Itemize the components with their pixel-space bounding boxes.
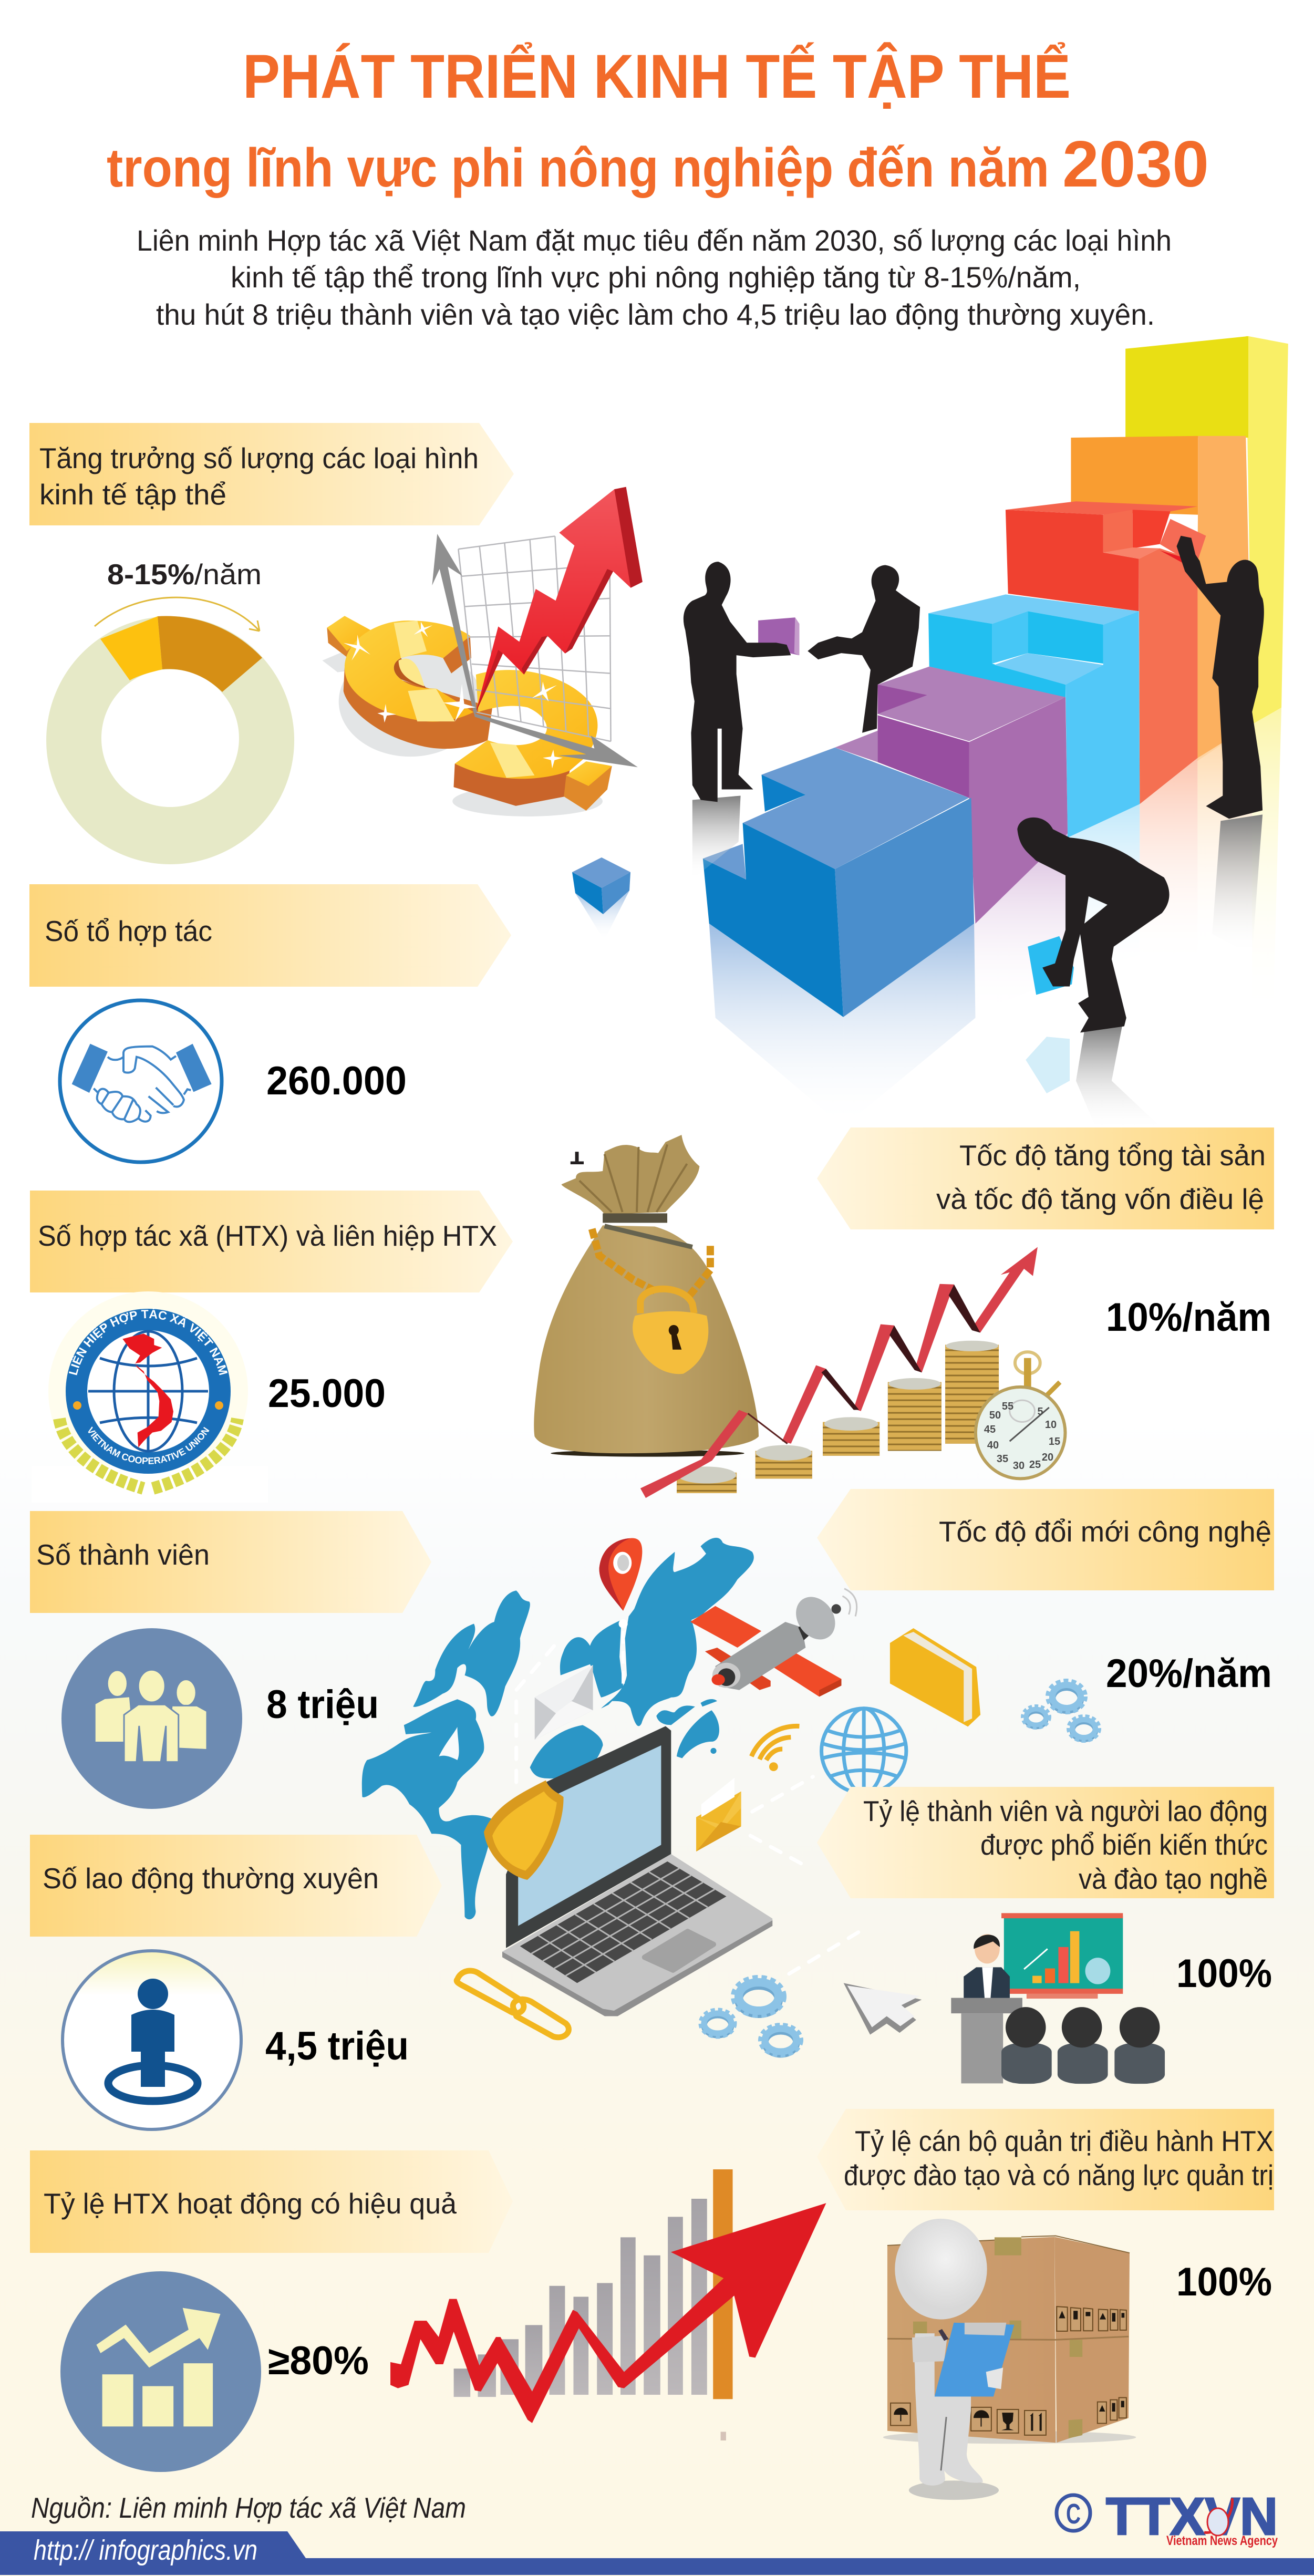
logo: TTXVN: Vietnam News Agency: [1166, 2533, 1278, 2548]
ribbon: số thành viên: Số thành viên: [36, 1538, 210, 1571]
chart grid: [458, 529, 611, 741]
box handling symbols: [891, 2306, 1126, 2435]
number: 25.000: 25.000: [268, 1371, 386, 1416]
source: Nguồn: Liên minh Hợp tác xã Việt Nam: [31, 2491, 466, 2524]
logo: TTXVN: C: [1066, 2498, 1081, 2530]
ribbon: phổ biến kiến thức: và đào tạo nghề: [1079, 1863, 1268, 1895]
title: trong lĩnh vực phi nông nghiệp đến năm: [107, 138, 1049, 199]
silhouette reflections: [692, 795, 1263, 1130]
small mail icon: [696, 1778, 741, 1851]
silhouette: man 4 bending: [1017, 818, 1170, 1032]
ribbon: growth: [29, 423, 514, 525]
title: [107, 42, 1209, 201]
ribbon: số lao động: Số lao động thường xuyên: [43, 1862, 379, 1895]
stopwatch: [976, 1352, 1065, 1478]
ribbon: số lao động: [30, 1835, 442, 1937]
number: ≥80%: ≥80%: [268, 2339, 369, 2383]
ribbon: số tổ hợp tác: Số tổ hợp tác: [45, 915, 212, 947]
stopwatch numbers: 25: [1029, 1459, 1041, 1471]
logo: Vietnam Cooperative Union: LIÊN HIỆP HỢP TÁC XÃ VIỆT NAM: [69, 1308, 227, 1375]
stopwatch numbers: 20: [1042, 1452, 1053, 1463]
ribbon: tốc độ tăng tổng tài sản: và tốc độ tăng vốn điều lệ: [936, 1183, 1264, 1215]
silhouette: man 1: [684, 562, 791, 802]
illustration: world map and laptop: [362, 1538, 922, 2037]
cursor icon: [844, 1983, 922, 2035]
ribbon: số hợp tác xã: [30, 1191, 513, 1292]
intro text: kinh tế tập thể trong lĩnh vực phi nông nghiệp tăng từ 8-15%/năm,: [231, 261, 1081, 294]
illustration: money bag with padlock: [534, 1135, 759, 1457]
icon: small blue cube: [572, 857, 630, 940]
grey axes arrows: [432, 534, 638, 767]
icon: growth chart circle: [60, 2271, 261, 2472]
stopwatch numbers: 5: [1037, 1406, 1043, 1418]
location pin: [599, 1538, 642, 1611]
illustration: 3D man with boxes: [883, 2219, 1136, 2500]
stopwatch numbers: 35: [997, 1453, 1008, 1465]
ribbon: tỷ lệ cán bộ: [817, 2109, 1274, 2210]
stopwatch numbers: 15: [1049, 1436, 1060, 1447]
envelope: [535, 1665, 593, 1740]
satellite: [690, 1589, 857, 1696]
world map: [362, 1538, 754, 1919]
bar chart with red arrow: [390, 2169, 826, 2440]
ribbon: phổ biến kiến thức: được phổ biến kiến thức: [980, 1828, 1268, 1861]
dashed route: [620, 1621, 626, 1687]
ribbon: HTX hiệu quả: [30, 2150, 513, 2253]
illustration: teamwork building coloured staircase: [684, 336, 1288, 1130]
stopwatch numbers: 45: [984, 1424, 996, 1435]
ribbon: số tổ hợp tác: [29, 884, 511, 987]
ribbon: số thành viên: [30, 1511, 431, 1613]
intro text: thu hút 8 triệu thành viên và tạo việc làm cho 4,5 triệu lao động thường xuyên.: [156, 298, 1155, 331]
number: 100% managers: 100%: [1176, 2260, 1272, 2304]
ribbon: HTX hiệu quả: Tỷ lệ HTX hoạt động có hiệu quả: [44, 2187, 457, 2220]
intro text: [137, 224, 1172, 331]
wifi icon: [751, 1726, 799, 1771]
3D man: [895, 2219, 1014, 2500]
number: 4,5 triệu: 4,5 triệu: [265, 2024, 409, 2068]
box tape: [913, 2237, 1082, 2438]
donut chart 8-15%/năm: /năm: [194, 558, 262, 591]
folder icon: [890, 1628, 980, 1726]
number: 8 triệu: 8 triệu: [266, 1682, 379, 1727]
silhouette: man 2: [808, 565, 920, 733]
purple box: [758, 617, 799, 655]
presenter and board: [951, 1913, 1165, 2084]
stopwatch numbers: 50: [989, 1410, 1001, 1421]
dollar extrusion: [327, 628, 612, 811]
logo: Vietnam Cooperative Union: VIETNAM COOPERATIVE UNION: [88, 1426, 209, 1464]
cyan cube: [1028, 936, 1074, 995]
ribbon: growth: kinh tế tập thể: [39, 478, 226, 511]
icon: members circle: [61, 1628, 242, 1809]
donut chart 8-15%/năm: 8-15%: [107, 558, 194, 591]
number: 260.000: 260.000: [266, 1059, 407, 1103]
ribbon: phổ biến kiến thức: [817, 1787, 1274, 1898]
ribbon: số hợp tác xã: Số hợp tác xã (HTX) và liên hiệp HTX: [38, 1219, 497, 1252]
footer band: http:// infographics.vn: [34, 2534, 257, 2566]
ribbon: tốc độ tăng tổng tài sản: Tốc độ tăng tổng tài sản: [959, 1139, 1266, 1172]
chain links: [457, 1971, 568, 2037]
folder and presenter group: [890, 1628, 1165, 2084]
stopwatch numbers: 55: [1002, 1401, 1013, 1412]
ribbon: đổi mới công nghệ: [817, 1489, 1274, 1590]
title: 2030: [1062, 128, 1209, 201]
ribbon: phổ biến kiến thức: Tỷ lệ thành viên và người lao động: [863, 1795, 1268, 1827]
stopwatch numbers: 30: [1013, 1460, 1025, 1472]
logo: TTXVN: TTXVN: [1106, 2487, 1278, 2546]
laptop: [502, 1726, 772, 2016]
gears icons: [700, 1681, 1100, 2055]
rising line: [640, 1247, 1038, 1498]
sparkles: [344, 622, 563, 768]
ribbon: tỷ lệ cán bộ: Tỷ lệ cán bộ quản trị điều hành HTX: [855, 2125, 1274, 2157]
ribbon: đổi mới công nghệ: Tốc độ đổi mới công nghệ: [939, 1515, 1271, 1548]
globe icon: [822, 1709, 906, 1793]
red arrow: [476, 487, 643, 712]
intro text: Liên minh Hợp tác xã Việt Nam đặt mục tiêu đến năm 2030, số lượng các loại hình: [137, 224, 1172, 257]
logo: Vietnam Cooperative Union: [48, 1291, 248, 1494]
dashed connectors: [516, 1639, 863, 1974]
ribbon: tốc độ tăng tổng tài sản: [817, 1127, 1274, 1229]
stopwatch numbers: [984, 1401, 1060, 1472]
stopwatch numbers: 40: [987, 1440, 999, 1451]
ribbon: tỷ lệ cán bộ: được đào tạo và có năng lực quản trị: [844, 2159, 1274, 2191]
title: PHÁT TRIỂN KINH TẾ TẬP THỂ: [243, 42, 1071, 111]
illustration: coins and rising line: [640, 1247, 1065, 1498]
donut chart 8-15%/năm: [46, 558, 294, 864]
icon: handshake circle: [60, 1000, 222, 1162]
icon: worker circle: [63, 1951, 241, 2129]
silhouette: man 3: [1177, 536, 1264, 819]
dollar top surface: [327, 616, 612, 786]
ribbon: growth: Tăng trưởng số lượng các loại hình: [39, 442, 479, 474]
shield: [484, 1781, 564, 1880]
stopwatch numbers: 10: [1045, 1419, 1057, 1431]
number: 100% training: 100%: [1176, 1951, 1272, 1996]
footer band: [0, 2531, 1314, 2575]
illustration: dollar sign and rising arrow: [322, 487, 643, 816]
number: 20%/năm: 20%/năm: [1106, 1651, 1272, 1696]
number: 10%/năm: 10%/năm: [1106, 1295, 1271, 1340]
